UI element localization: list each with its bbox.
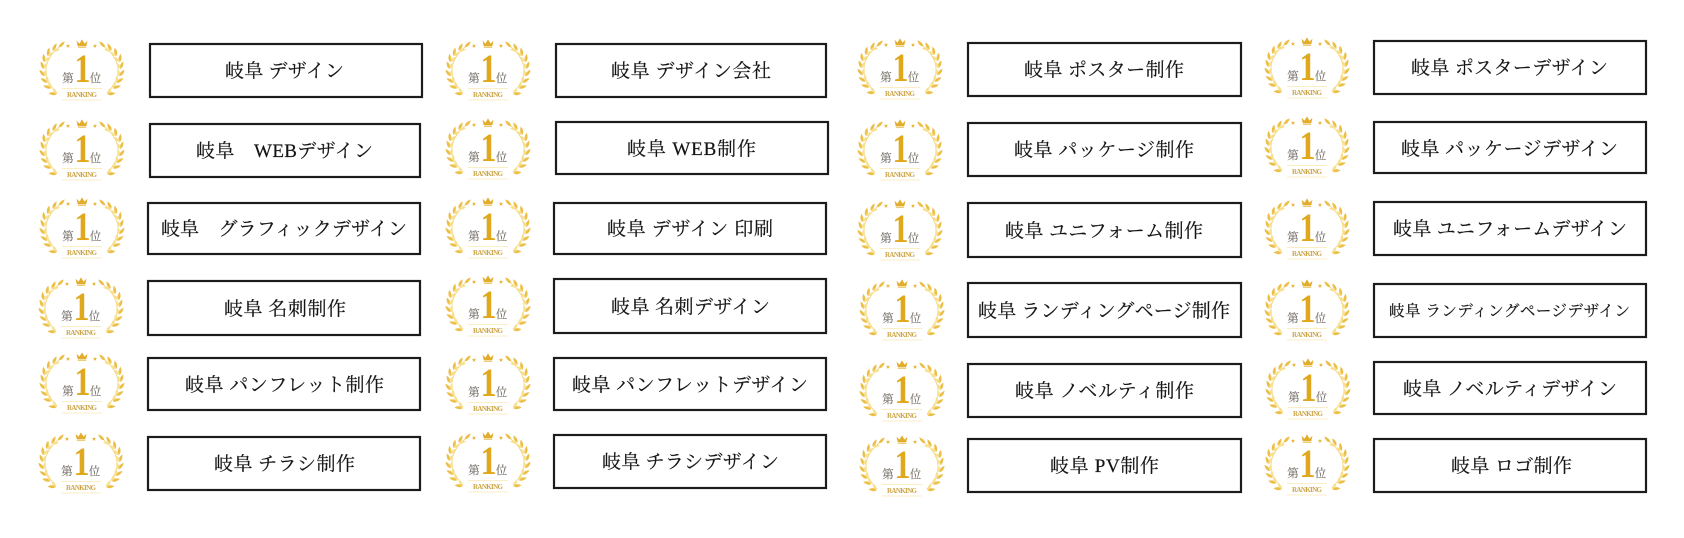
badge: first place: 第 <box>468 230 480 243</box>
badge: first place: RANKING <box>1292 250 1323 258</box>
badge: first place: 位 <box>496 150 508 164</box>
ranking item: 岐阜 チラシ制作 <box>37 432 420 493</box>
ranking item: 岐阜 名刺制作 <box>37 277 420 338</box>
keyword label: 岐阜 デザイン <box>225 60 344 82</box>
badge: first place: 位 <box>496 229 508 243</box>
badge: first place: 位 <box>908 231 920 245</box>
badge: first place: 1 <box>481 439 496 483</box>
badge: first place: 1 <box>1301 366 1316 410</box>
badge: first place: 位 <box>908 70 920 84</box>
badge: first place: 1 <box>481 283 496 327</box>
keyword box <box>1374 41 1646 94</box>
badge: first place: 第 <box>1287 312 1299 325</box>
badge: first place: 第 <box>882 468 894 481</box>
keyword box <box>554 203 826 254</box>
badge: first place: 位 <box>496 385 508 399</box>
badge: first place: 位 <box>908 151 920 165</box>
badge: first place: RANKING <box>885 171 916 179</box>
badge: first place <box>1263 434 1351 495</box>
badge: first place: 第 <box>468 151 480 164</box>
badge: first place: 1 <box>1300 442 1315 486</box>
badge: first place: 位 <box>89 309 101 323</box>
keyword label: 岐阜 WEBデザイン <box>196 140 373 162</box>
keyword label: 岐阜 ポスター制作 <box>1024 59 1184 81</box>
keyword label: 岐阜 ノベルティデザイン <box>1403 378 1617 400</box>
keyword box <box>148 437 420 490</box>
badge: first place: 第 <box>62 152 74 165</box>
badge: first place: 1 <box>1300 45 1315 89</box>
badge: first place: 位 <box>910 311 922 325</box>
badge: first place: RANKING <box>1292 486 1323 494</box>
badge: first place: 1 <box>75 47 90 91</box>
ranking item: 岐阜 ランディングページデザイン <box>1263 279 1646 340</box>
keyword box <box>968 364 1241 417</box>
badge: first place: 第 <box>1287 231 1299 244</box>
ranking item: 岐阜 ポスターデザイン <box>1263 37 1646 98</box>
badge: first place: 第 <box>882 312 894 325</box>
badge: first place: 第 <box>468 308 480 321</box>
keyword label: 岐阜 ポスターデザイン <box>1411 57 1608 79</box>
keyword label: 岐阜 パンフレット制作 <box>185 374 384 396</box>
ranking item: 岐阜 ユニフォーム制作 <box>856 199 1241 260</box>
badge: first place <box>37 432 125 493</box>
badge: first place: RANKING <box>1292 89 1323 97</box>
keyword label: 岐阜 グラフィックデザイン <box>161 218 407 240</box>
keyword label: 岐阜 ユニフォーム制作 <box>1005 220 1203 242</box>
badge: first place: RANKING <box>67 404 98 412</box>
badge: first place: 位 <box>496 463 508 477</box>
badge: first place: 1 <box>895 443 910 487</box>
badge: first place <box>856 119 944 180</box>
ranking item: 岐阜 パンフレットデザイン <box>444 353 826 414</box>
badge: first place: 第 <box>62 72 74 85</box>
badge: first place: 1 <box>893 207 908 251</box>
keyword box <box>148 203 420 254</box>
keyword box <box>1374 202 1646 255</box>
ranking item: 岐阜 ランディングページ制作 <box>858 279 1241 340</box>
badge: first place <box>1264 358 1352 419</box>
ranking item: 岐阜 グラフィックデザイン <box>38 197 420 258</box>
badge: first place: 第 <box>468 386 480 399</box>
badge: first place <box>858 360 946 421</box>
badge: first place: 位 <box>90 229 102 243</box>
ranking item: 岐阜 パンフレット制作 <box>38 352 420 413</box>
ranking item: 岐阜 ポスター制作 <box>856 38 1241 99</box>
ranking item: 岐阜 WEBデザイン <box>38 119 420 180</box>
badge: first place: 1 <box>481 126 496 170</box>
badge: first place: 第 <box>880 71 892 84</box>
badge: first place: 位 <box>910 467 922 481</box>
badge: first place: 第 <box>61 310 73 323</box>
badge: first place: RANKING <box>887 412 918 420</box>
ranking item: 岐阜 ノベルティ制作 <box>858 360 1241 421</box>
ranking item: 岐阜 デザイン <box>38 39 422 100</box>
badge: first place: RANKING <box>887 331 918 339</box>
badge: first place <box>444 197 532 258</box>
ranking item: 岐阜 ユニフォームデザイン <box>1263 198 1646 259</box>
badge: first place: 第 <box>1287 70 1299 83</box>
badge: first place: 位 <box>90 384 102 398</box>
keyword box <box>148 281 420 335</box>
badge: first place: 第 <box>880 232 892 245</box>
keyword box <box>1374 362 1646 414</box>
badge: first place: 位 <box>90 151 102 165</box>
badge: first place: 位 <box>496 71 508 85</box>
keyword box <box>150 44 422 97</box>
badge: first place <box>1263 37 1351 98</box>
keyword box <box>968 123 1241 176</box>
keyword box <box>1374 439 1646 492</box>
badge: first place: RANKING <box>885 90 916 98</box>
badge: first place: 1 <box>895 368 910 412</box>
keyword box <box>968 439 1241 492</box>
badge: first place: 1 <box>74 285 89 329</box>
badge: first place: 位 <box>89 464 101 478</box>
ranking item: 岐阜 チラシデザイン <box>444 431 826 492</box>
badge: first place: 1 <box>75 205 90 249</box>
badge: first place: 位 <box>90 71 102 85</box>
keyword label: 岐阜 デザイン 印刷 <box>607 218 773 240</box>
badge: first place: 第 <box>468 464 480 477</box>
badge: first place: 1 <box>1300 206 1315 250</box>
badge: first place <box>444 118 532 179</box>
badge: first place: 1 <box>481 47 496 91</box>
keyword label: 岐阜 デザイン会社 <box>611 60 771 82</box>
badge: first place <box>444 39 532 100</box>
keyword label: 岐阜 チラシデザイン <box>602 451 779 473</box>
badge: first place: RANKING <box>473 327 504 335</box>
badge: first place: 1 <box>893 46 908 90</box>
badge: first place: RANKING <box>67 249 98 257</box>
ranking item: 岐阜 PV制作 <box>858 435 1241 496</box>
badge: first place: RANKING <box>1292 331 1323 339</box>
keyword label: 岐阜 名刺デザイン <box>611 296 770 318</box>
badge: first place: 位 <box>1316 390 1328 404</box>
badge: first place: 1 <box>75 127 90 171</box>
badge: first place: 位 <box>1315 230 1327 244</box>
ranking item: 岐阜 デザイン会社 <box>444 39 826 100</box>
badge: first place: RANKING <box>885 251 916 259</box>
badge: first place: 第 <box>1288 391 1300 404</box>
badge: first place: RANKING <box>473 483 504 491</box>
keyword box <box>1374 284 1646 337</box>
keyword box <box>554 358 826 410</box>
badge: first place <box>444 353 532 414</box>
keyword label: 岐阜 WEB制作 <box>627 138 756 160</box>
badge: first place: RANKING <box>887 487 918 495</box>
badge: first place: 第 <box>1287 149 1299 162</box>
badge: first place <box>858 435 946 496</box>
badge: first place: 位 <box>910 392 922 406</box>
badge: first place: 1 <box>74 440 89 484</box>
badge: first place: 1 <box>481 205 496 249</box>
keyword box <box>968 43 1241 96</box>
ranking item: 岐阜 パッケージ制作 <box>856 119 1241 180</box>
badge: first place: 1 <box>481 361 496 405</box>
badge: first place: 位 <box>1315 148 1327 162</box>
badge: first place: RANKING <box>66 484 97 492</box>
keyword box <box>148 358 420 410</box>
badge: first place <box>856 199 944 260</box>
badge: first place: RANKING <box>473 405 504 413</box>
keyword label: 岐阜 チラシ制作 <box>214 453 355 475</box>
keyword label: 岐阜 ロゴ制作 <box>1451 455 1572 477</box>
badge: first place: RANKING <box>67 171 98 179</box>
badge: first place: 第 <box>1287 467 1299 480</box>
badge: first place <box>1263 116 1351 177</box>
keyword box <box>150 124 420 177</box>
badge: first place: RANKING <box>1293 410 1324 418</box>
badge: first place <box>38 352 126 413</box>
keyword label: 岐阜 パッケージデザイン <box>1401 138 1618 160</box>
keyword label: 岐阜 ノベルティ制作 <box>1015 380 1194 402</box>
badge: first place <box>38 197 126 258</box>
badge: first place: 第 <box>882 393 894 406</box>
badge: first place <box>37 277 125 338</box>
badge: first place: RANKING <box>473 249 504 257</box>
badge: first place: RANKING <box>473 170 504 178</box>
badge: first place: 1 <box>75 360 90 404</box>
ranking item: 岐阜 名刺デザイン <box>444 275 826 336</box>
badge: first place: RANKING <box>66 329 97 337</box>
badge: first place <box>856 38 944 99</box>
keyword label: 岐阜 パンフレットデザイン <box>572 374 808 396</box>
keyword box <box>968 203 1241 257</box>
keyword label: 岐阜 ランディングページデザイン <box>1389 302 1630 320</box>
badge: first place: 位 <box>496 307 508 321</box>
badge: first place <box>38 39 126 100</box>
badge: first place <box>444 275 532 336</box>
keyword box <box>968 283 1241 337</box>
badge: first place: 第 <box>880 152 892 165</box>
badge: first place <box>858 279 946 340</box>
badge: first place: 1 <box>1300 287 1315 331</box>
badge: first place: 位 <box>1315 69 1327 83</box>
badge: first place: 1 <box>893 127 908 171</box>
badge: first place: 位 <box>1315 311 1327 325</box>
keyword box <box>556 122 828 174</box>
badge: first place: RANKING <box>473 91 504 99</box>
keyword label: 岐阜 ランディングページ制作 <box>978 300 1230 322</box>
ranking item: 岐阜 WEB制作 <box>444 118 828 179</box>
badge: first place: 第 <box>62 385 74 398</box>
ranking item: 岐阜 デザイン 印刷 <box>444 197 826 258</box>
ranking item: 岐阜 ロゴ制作 <box>1263 434 1646 495</box>
keyword box <box>556 44 826 97</box>
keyword label: 岐阜 名刺制作 <box>224 298 346 320</box>
keyword label: 岐阜 パッケージ制作 <box>1014 139 1194 161</box>
keyword label: 岐阜 ユニフォームデザイン <box>1393 218 1627 240</box>
badge: first place <box>1263 198 1351 259</box>
badge: first place: 第 <box>62 230 74 243</box>
badge: first place: 1 <box>1300 124 1315 168</box>
badge: first place: RANKING <box>1292 168 1323 176</box>
badge: first place: RANKING <box>67 91 98 99</box>
badge: first place: 第 <box>61 465 73 478</box>
keyword box <box>1374 122 1646 173</box>
ranking item: 岐阜 パッケージデザイン <box>1263 116 1646 177</box>
badge: first place: 1 <box>895 287 910 331</box>
badge: first place: 位 <box>1315 466 1327 480</box>
badge: first place <box>444 431 532 492</box>
badge: first place <box>38 119 126 180</box>
keyword label: 岐阜 PV制作 <box>1050 455 1159 477</box>
badge: first place: 第 <box>468 72 480 85</box>
ranking item: 岐阜 ノベルティデザイン <box>1264 358 1646 419</box>
keyword box <box>554 279 826 333</box>
keyword box <box>554 435 826 488</box>
badge: first place <box>1263 279 1351 340</box>
